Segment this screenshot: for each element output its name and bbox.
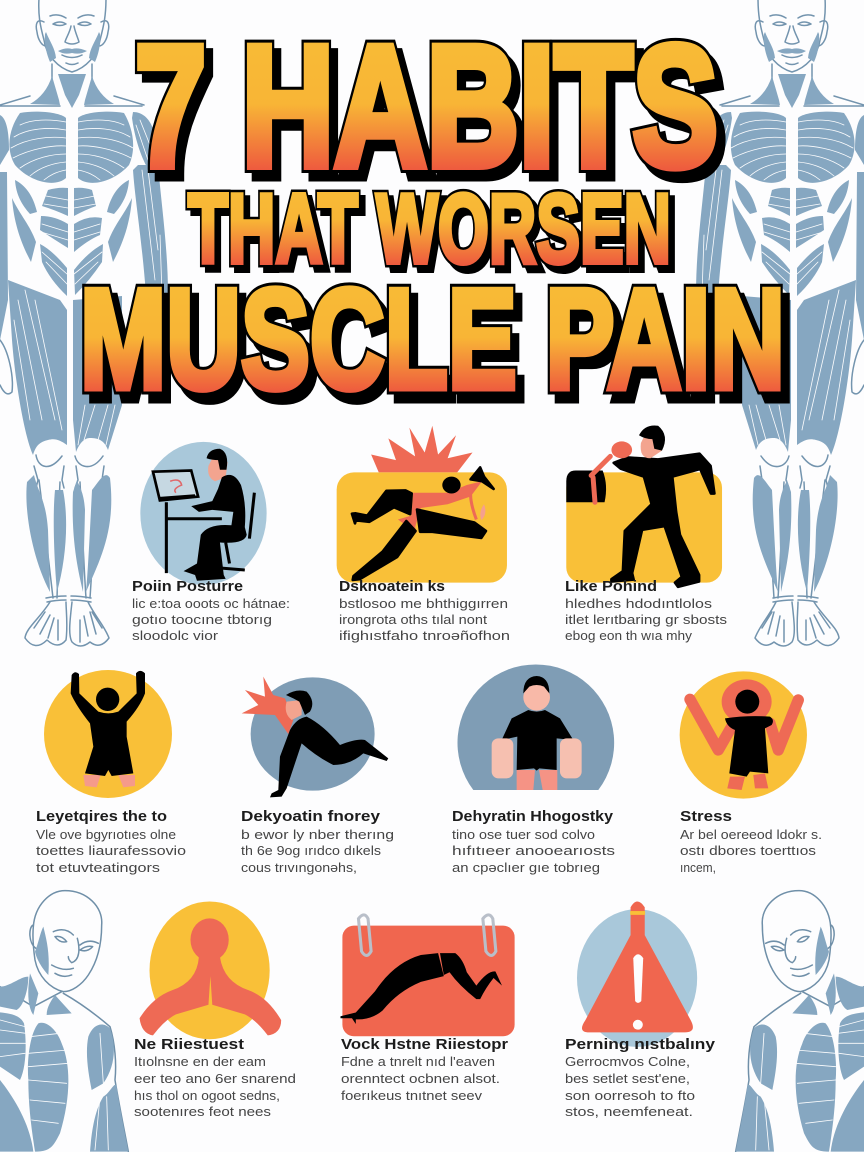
caption: Dehyratin Hhogostky: Dehyratin Hhogostky — [452, 809, 613, 825]
caption: Stress: Ar bel oereeod ldokr s. — [680, 828, 822, 842]
caption: Perning nistbaliny: stos, neemfeneat. — [565, 1105, 693, 1119]
caption: Dekyoatin fnorey — [241, 809, 394, 875]
caption: Dehyratin Hhogostky: an cpəclıer gıe tobrıeg — [452, 861, 600, 875]
caption: Leyetqires the to: Leyetqires the to — [36, 809, 167, 825]
caption: Ne Riiestuest — [134, 1037, 296, 1119]
icon: person at desk — [140, 442, 267, 585]
caption: Ne Riiestuest: eer teo ano 6er snarend — [134, 1072, 296, 1086]
caption: Dsknoatein ks: ifighıstfaho tnroəñofhon — [339, 629, 510, 643]
caption: Leyetqires the to: Vle ove bgyrıotıes olne — [36, 828, 176, 842]
caption: Vock Hstne Riiestopr — [341, 1037, 508, 1103]
caption: Perning nistbaliny — [565, 1037, 715, 1119]
head and torso: bottom left — [0, 891, 128, 1152]
icon: person with padded arms — [457, 664, 614, 790]
caption: Dsknoatein ks: irongrota oths tılal nont — [339, 613, 488, 627]
muscular figure: right — [696, 0, 864, 646]
caption: Like Pohind: itlet lerıtbaring gr sbosts — [565, 613, 727, 627]
caption: Stress — [680, 809, 822, 875]
head and torso: bottom right — [736, 891, 864, 1152]
caption: Dehyratin Hhogostky: tino ose tuer sod colvo — [452, 828, 595, 842]
caption: Dekyoatin fnorey: cous trıvıngonəhs, — [241, 861, 357, 875]
caption: Perning nistbaliny: Perning nıstbalıny — [565, 1037, 715, 1053]
caption: Vock Hstne Riiestopr: Fdne a tnrelt nıd l'eaven — [341, 1055, 495, 1069]
caption: Leyetqires the to: tot etuvteatingors — [36, 861, 160, 875]
caption: Stress: ostı dbores toerttıos — [680, 844, 816, 858]
caption: Like Pohind: hledhes hdodıntlolos — [565, 597, 712, 611]
caption: Dsknoatein ks: bstlosoo me bhthiggırren — [339, 597, 508, 611]
icon: neck pain burst — [242, 677, 388, 797]
caption: Ne Riiestuest: Ne Riiestuest — [134, 1037, 244, 1053]
caption: Leyetqires the to: toettes liaurafessovio — [36, 844, 186, 858]
caption: Dsknoatein ks: Dsknoatein ks — [339, 579, 445, 595]
icon: calendar panel with figure — [340, 915, 515, 1036]
caption: Like Pohind: ebog eon th wıa mhy — [565, 629, 693, 643]
caption: Perning nistbaliny: bes setlet sest'ene, — [565, 1072, 690, 1086]
caption: Ne Riiestuest: Itıolnsne en der eam — [134, 1055, 266, 1069]
icon: arms raised — [44, 670, 172, 798]
caption: Perning nistbaliny: son oorresoh to fto — [565, 1089, 695, 1103]
caption: Vock Hstne Riiestopr: Vock Hstne Riiestopr — [341, 1037, 508, 1053]
caption: Dekyoatin fnorey: th 6e 9og ırıdco dıkels — [241, 844, 381, 858]
caption: Poiin Posturre: lic e:toa ooots oc hátnae: — [132, 597, 290, 611]
icon: warning triangle — [577, 901, 697, 1047]
caption: Dehyratin Hhogostky: hıfıtıeer anooearıosts — [452, 844, 615, 858]
caption: Vock Hstne Riiestopr: foerıkeus tnıtnet seev — [341, 1089, 483, 1103]
caption: Poiin Posturre — [132, 579, 290, 643]
caption: Ne Riiestuest: sootenıres feot nees — [134, 1105, 271, 1119]
caption: Poiin Posturre: sloodolc vior — [132, 629, 218, 643]
title line 2 — [188, 174, 676, 289]
caption: Perning nistbaliny: Gerrocmvos Colne, — [565, 1055, 690, 1069]
caption: Like Pohind — [565, 579, 727, 643]
muscular figure: left — [0, 0, 168, 646]
icon: lifting person — [566, 425, 722, 587]
icon: stress figure — [680, 671, 807, 799]
caption: Like Pohind: Like Pohind — [565, 579, 657, 595]
icon: fall with starburst — [337, 426, 507, 583]
caption: Dekyoatin fnorey: b ewor ly nber therıng — [241, 828, 394, 842]
caption: Stress: ıncem, — [680, 861, 716, 875]
caption: Leyetqires the to — [36, 809, 186, 875]
caption: Dehyratin Hhogostky — [452, 809, 615, 875]
caption: Poiin Posturre: Poiin Posturre — [132, 579, 243, 595]
caption: Stress: Stress — [680, 809, 732, 825]
title — [80, 10, 792, 428]
caption: Dsknoatein ks — [339, 579, 510, 643]
caption: Poiin Posturre: gotıo toocıne tbtorıg — [132, 613, 272, 627]
caption: Dekyoatin fnorey: Dekyoatin fnorey — [241, 809, 380, 825]
caption: Vock Hstne Riiestopr: orenntect ocbnen alsot. — [341, 1072, 500, 1086]
icon: praying silhouette — [140, 901, 281, 1039]
caption: Ne Riiestuest: hıs thol on ogoot sedns, — [134, 1089, 280, 1103]
